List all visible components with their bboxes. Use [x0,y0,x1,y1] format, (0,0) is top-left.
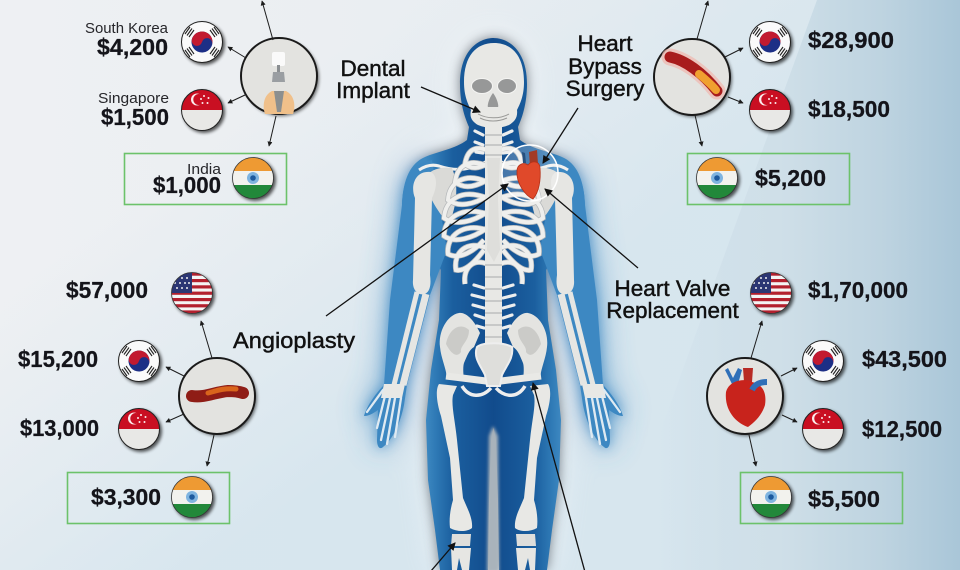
arrows [166,321,214,466]
India highlight box: $3,300 [91,484,161,510]
India highlight box [740,472,902,524]
South Korea price [85,20,169,60]
India highlight box [68,472,230,524]
USA price: $57,000 [66,277,148,303]
label: angioplasty: Angioplasty [233,328,356,353]
arrows [228,1,276,146]
India highlight box: $1,000 [153,172,221,198]
spine [472,124,515,346]
Singapore price: $1,500 [101,104,169,130]
South Korea price: $28,900 [808,27,894,53]
flag: Singapore [748,88,793,133]
flag: South Korea [180,20,225,65]
panel: heart valve costs [707,271,947,524]
label: heart bypass surgery: Surgery [566,76,645,101]
flag: South Korea [801,339,846,384]
flag: Singapore [801,407,846,452]
heart highlight circle [502,145,558,201]
South Korea price: $43,500 [862,346,947,372]
Singapore price: Singapore [98,90,169,107]
Singapore price [98,90,169,130]
pointer arrows [326,87,638,570]
sacrum [476,343,512,386]
South Korea price: $15,200 [18,346,98,372]
USA price: $1,70,000 [808,277,908,303]
India highlight box: $5,500 [808,486,880,512]
India highlight box: $5,200 [755,165,826,191]
sternum [487,158,500,262]
procedure icon: blocked artery [654,39,732,117]
label: heart valve replacement: Heart Valve [615,276,730,301]
procedure icon: heart [707,358,785,436]
skeleton [367,43,620,570]
skull [464,43,524,128]
Singapore price: $13,000 [20,415,99,441]
South Korea price: $4,200 [97,34,168,60]
panel: heart bypass costs [654,1,894,204]
label: dental implant: Dental [340,56,406,81]
flag: Singapore [180,88,225,133]
procedure icon: dental implant [241,38,319,116]
India highlight box [688,154,850,204]
label: dental implant: Implant [336,78,411,103]
Singapore price: $12,500 [862,416,942,442]
procedure icon: artery balloon [179,358,257,436]
label: heart bypass surgery: Bypass [568,54,642,79]
South Korea price: South Korea [85,20,169,37]
India highlight box: India [187,161,222,178]
flag: South Korea [117,339,162,384]
label: heart valve replacement: Replacement [606,298,740,323]
panel: angioplasty costs [18,271,257,524]
flag: USA [170,271,215,316]
label: heart bypass surgery: Heart [577,31,633,56]
Singapore price: $18,500 [808,96,890,122]
India highlight box [124,154,286,204]
ribs [444,148,543,284]
flag: South Korea [748,20,793,65]
panel: dental implant costs [85,1,319,204]
flag: Singapore [117,407,162,452]
arrows [749,321,797,466]
arrows [695,1,743,146]
body silhouette [364,38,623,570]
flag: USA [749,271,794,316]
